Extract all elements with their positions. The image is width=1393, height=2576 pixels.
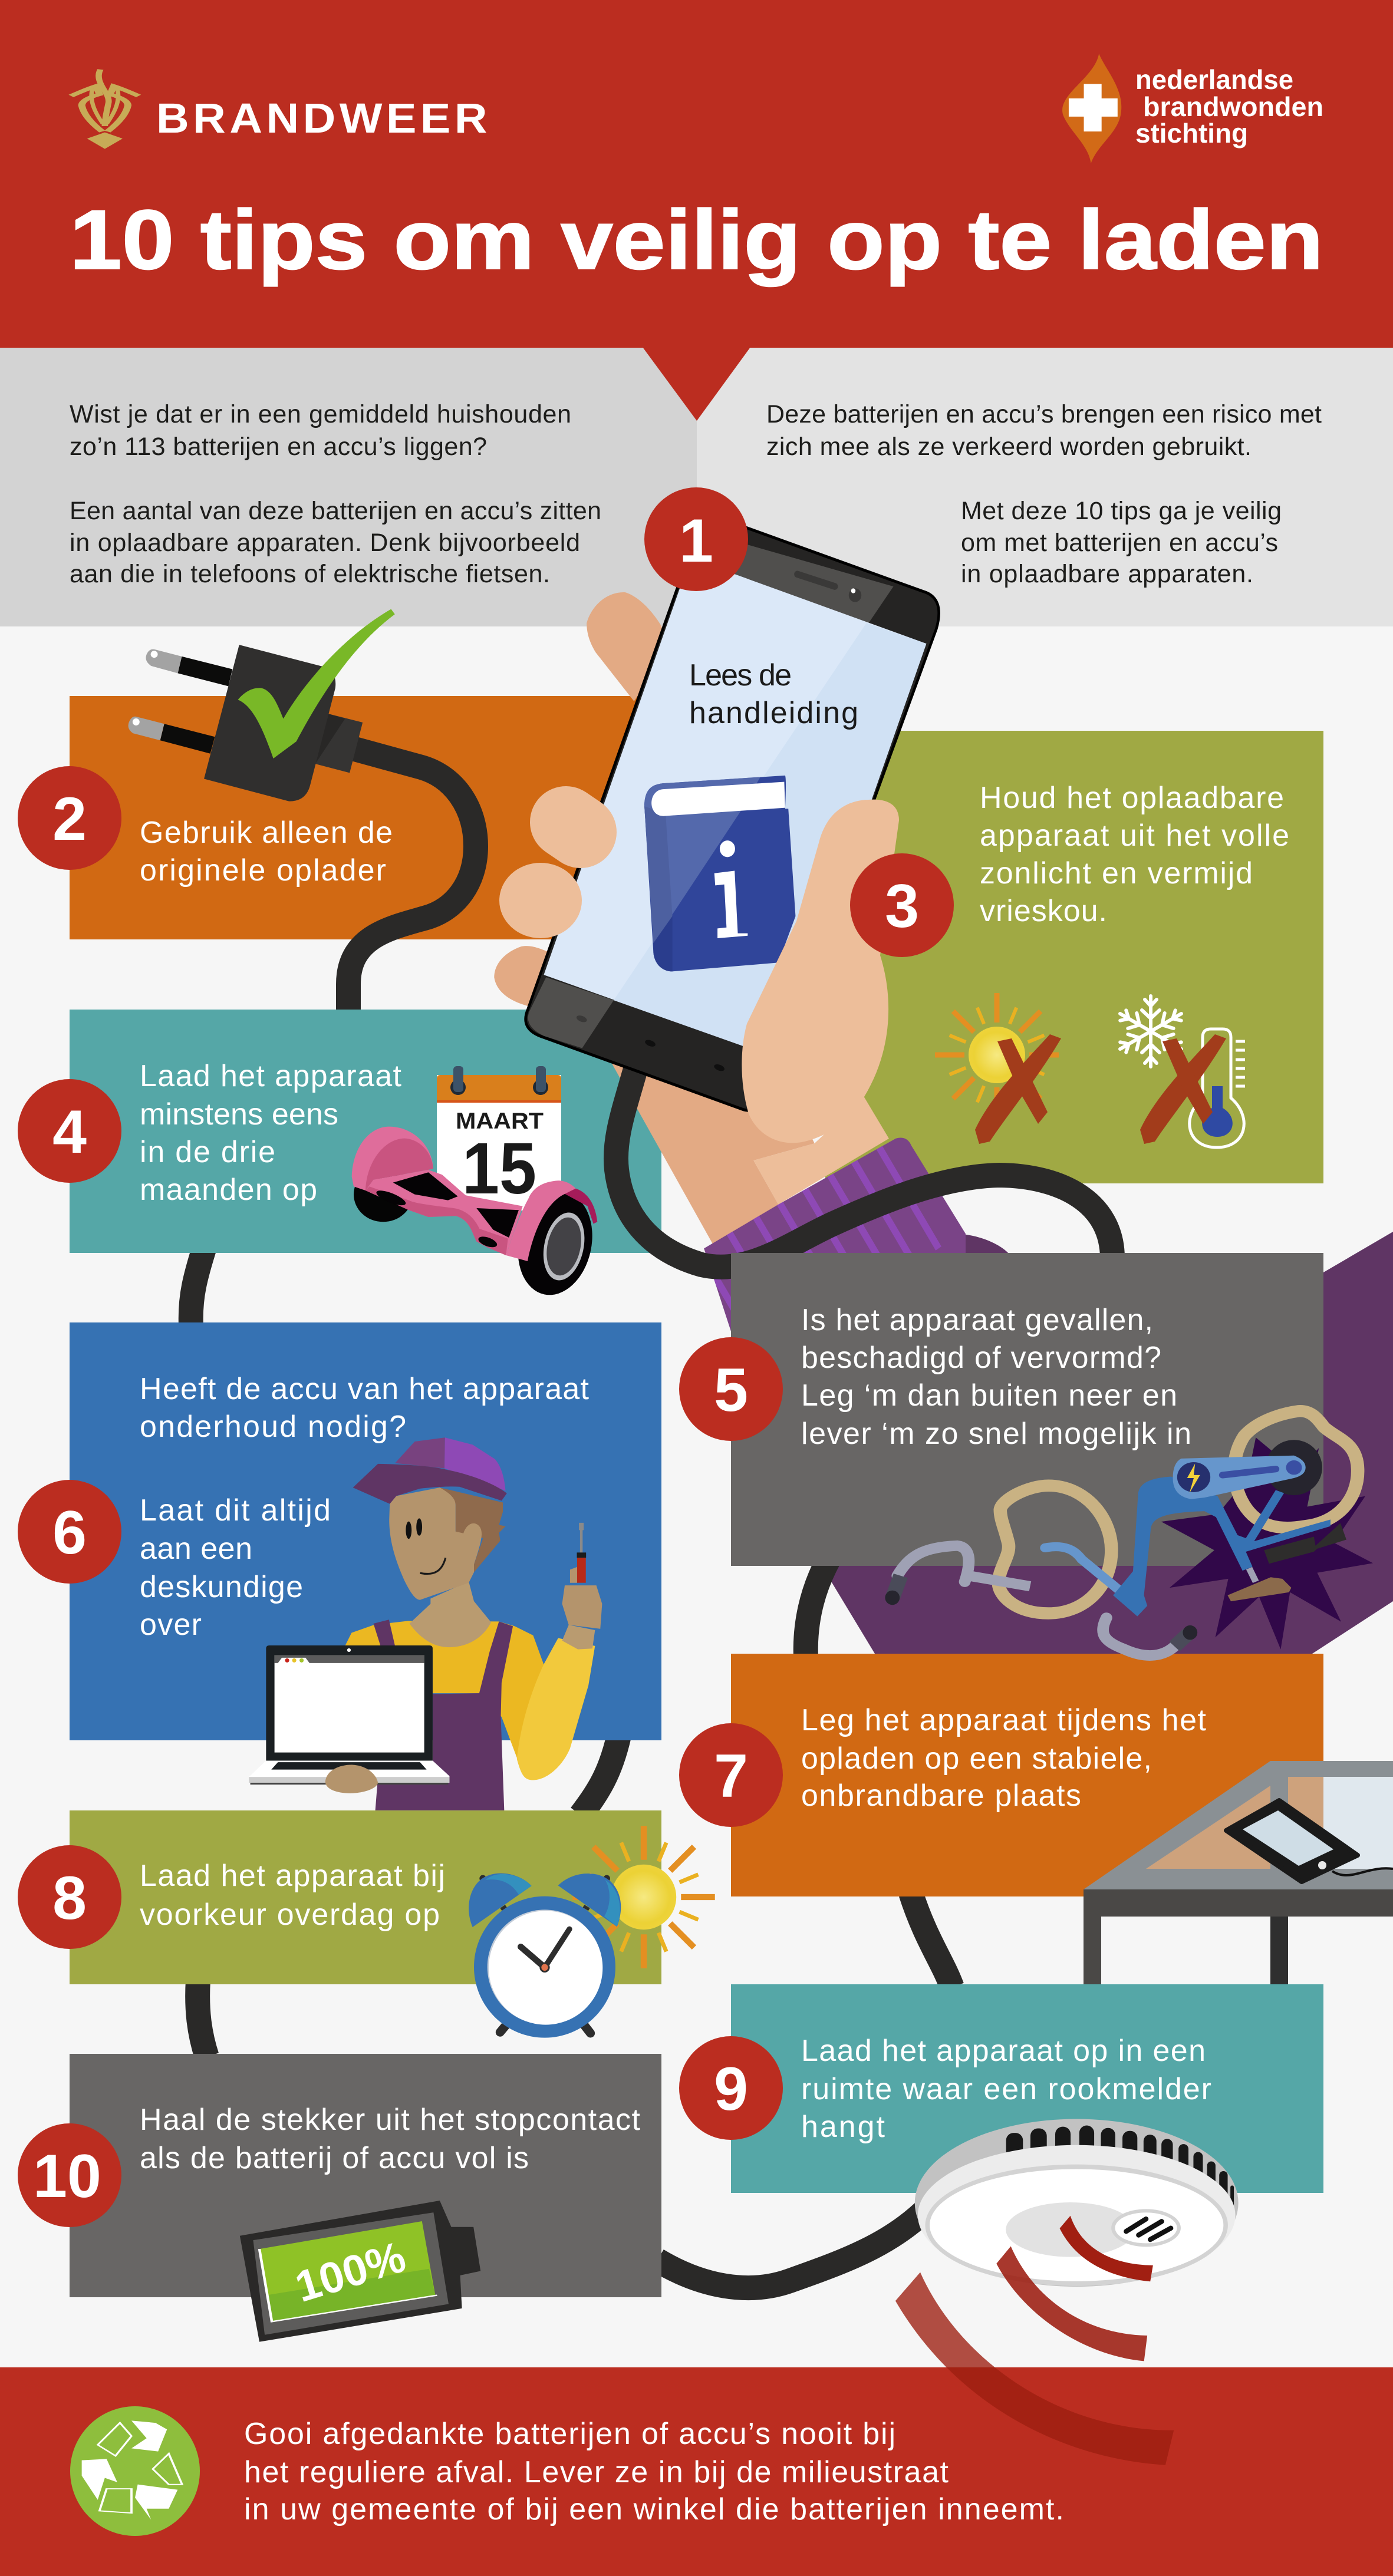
cable: tip 5 to tip 7 bbox=[806, 1556, 831, 1657]
panel: tip 3 bbox=[825, 731, 1323, 1183]
charger cable bbox=[348, 749, 476, 1014]
panel: tip 6: Laat dit altijd bbox=[140, 1493, 331, 1528]
panel: tip 7: Leg het apparaat tijdens het bbox=[801, 1703, 1207, 1737]
sleeve bbox=[704, 1137, 966, 1331]
number badge 7 bbox=[679, 1723, 783, 1827]
hand holding phone, front fingers and thumb bbox=[499, 800, 899, 1143]
dark arm bbox=[895, 1234, 1009, 1254]
phone text: Lees de handleiding: handleiding bbox=[689, 696, 858, 730]
panel: intro left bbox=[0, 348, 697, 626]
number badge 9: 9 bbox=[714, 2055, 748, 2123]
logo: Nederlandse Brandwonden Stichting bbox=[1062, 54, 1323, 163]
number badge 5: 5 bbox=[714, 1356, 748, 1424]
panel: intro left: Wist je dat er in een gemiddeld huishouden bbox=[70, 400, 571, 428]
footer bbox=[0, 2367, 1393, 2576]
icon: battery 100%: 100% bbox=[289, 2232, 411, 2311]
number badge 10 bbox=[18, 2123, 121, 2227]
number badge 7: 7 bbox=[714, 1742, 748, 1810]
icon: plug with check mark bbox=[129, 609, 395, 802]
panel: tip 6: aan een bbox=[140, 1532, 252, 1566]
cable: tip 10 to smoke detector bbox=[657, 2207, 928, 2288]
panel: intro right bbox=[697, 348, 1393, 626]
panel: tip 9: hangt bbox=[801, 2110, 885, 2144]
panel: tip 7: onbrandbare plaats bbox=[801, 1779, 1081, 1813]
panel: tip 10 bbox=[70, 2054, 661, 2297]
panel: intro right: zich mee als ze verkeerd worden gebruikt. bbox=[766, 433, 1252, 461]
panel: intro right: in oplaadbare apparaten. bbox=[961, 560, 1253, 588]
number badge 5 bbox=[679, 1337, 783, 1441]
number badge 8 bbox=[18, 1845, 121, 1949]
number badge 6: 6 bbox=[52, 1499, 87, 1567]
illustration: repair worker with laptop bbox=[249, 1437, 602, 1810]
panel: tip 9 bbox=[731, 1984, 1323, 2193]
number badge 10: 10 bbox=[33, 2142, 101, 2211]
icon: hoverboard bbox=[352, 1127, 601, 1302]
logo: Nederlandse Brandwonden Stichting: brandwonden bbox=[1143, 91, 1323, 122]
title: 10 tips om veilig op te laden bbox=[70, 193, 1323, 287]
panel: tip 3: vrieskou. bbox=[980, 894, 1107, 928]
panel: tip 10: als de batterij of accu vol is bbox=[140, 2141, 529, 2175]
cable: tip 8 to tip 10 bbox=[197, 1980, 207, 2057]
number badge 3: 3 bbox=[885, 872, 919, 941]
phone text: Lees de handleiding bbox=[689, 658, 858, 730]
panel: tip 7 bbox=[731, 1654, 1323, 1896]
panel: tip 6: Heeft de accu van het apparaat bbox=[140, 1372, 590, 1406]
panel: tip 3: apparaat uit het volle bbox=[980, 819, 1289, 853]
hand holding phone, back part bbox=[494, 592, 1009, 1346]
icon: manual book bbox=[644, 776, 795, 971]
cable: tip 4 to tip 6 bbox=[191, 1238, 208, 1326]
icon: sun bbox=[572, 1826, 715, 1968]
purple backdrop behind tip 5 bbox=[822, 1232, 1393, 1654]
number badge 1: 1 bbox=[679, 507, 713, 575]
panel: tip 5: Leg ‘m dan buiten neer en bbox=[801, 1378, 1177, 1413]
panel: intro left: Een aantal van deze batterijen en accu’s zitten bbox=[70, 497, 601, 525]
panel: tip 6: onderhoud nodig? bbox=[140, 1410, 406, 1444]
number badge 9 bbox=[679, 2036, 783, 2140]
footer: Gooi afgedankte batterijen of accu’s nooit bij bbox=[244, 2417, 895, 2451]
icon: smoke detector with sound waves bbox=[895, 2119, 1239, 2465]
panel: tip 5 bbox=[731, 1253, 1323, 1566]
footer: het reguliere afval. Lever ze in bij de milieustraat bbox=[244, 2455, 949, 2489]
footer: in uw gemeente of bij een winkel die batterijen inneemt. bbox=[244, 2492, 1064, 2526]
number badge 3 bbox=[850, 853, 954, 957]
panel: tip 9: Laad het apparaat op in een bbox=[801, 2034, 1206, 2068]
logo: Nederlandse Brandwonden Stichting: nederlandse bbox=[1135, 64, 1293, 95]
panel: tip 4 bbox=[70, 1010, 661, 1253]
panel: intro right: om met batterijen en accu’s bbox=[961, 529, 1278, 557]
panel: intro left: zo’n 113 batterijen en accu’s liggen? bbox=[70, 433, 487, 461]
panel: intro left: in oplaadbare apparaten. Denk bijvoorbeeld bbox=[70, 529, 580, 557]
header pointer triangle bbox=[643, 347, 750, 421]
panel: tip 8: Laad het apparaat bij bbox=[140, 1859, 445, 1893]
logo: Brandweer: BRANDWEER bbox=[156, 95, 491, 142]
phone cable bbox=[616, 1061, 1112, 1267]
number badge 8: 8 bbox=[52, 1864, 87, 1932]
icon: alarm clock bbox=[469, 1874, 621, 2038]
cable: tip 6 to tip 8 bbox=[581, 1736, 619, 1815]
panel: tip 8 bbox=[70, 1810, 661, 1984]
panel: tip 6: deskundige bbox=[140, 1570, 303, 1604]
number badge 4 bbox=[18, 1079, 121, 1183]
panel: tip 4: minstens eens bbox=[140, 1097, 338, 1132]
illustration: bike wreck bbox=[885, 1411, 1373, 1655]
cable: tip 7 to tip 9 bbox=[911, 1893, 952, 1987]
logo: Nederlandse Brandwonden Stichting: stichting bbox=[1135, 118, 1248, 149]
logo: Brandweer bbox=[71, 70, 491, 149]
icon: sun crossed out bbox=[935, 993, 1061, 1144]
icon: snowflake and thermometer crossed out bbox=[1116, 996, 1245, 1147]
panel: intro left: aan die in telefoons of elektrische fietsen. bbox=[70, 560, 550, 588]
phone text: Lees de handleiding: Lees de bbox=[689, 658, 792, 692]
panel: tip 2: Gebruik alleen de bbox=[140, 816, 393, 850]
number badge 2 bbox=[18, 766, 121, 870]
panel: tip 6: over bbox=[140, 1608, 202, 1642]
number badge 1 bbox=[644, 487, 748, 591]
phone with manual icon bbox=[526, 521, 939, 1110]
icon: calendar 15 maart bbox=[437, 1066, 561, 1211]
icon: calendar 15 maart: MAART bbox=[456, 1109, 544, 1134]
panel: tip 8: voorkeur overdag op bbox=[140, 1898, 440, 1932]
panel: tip 2: originele oplader bbox=[140, 853, 386, 888]
panel: intro right: Met deze 10 tips ga je veilig bbox=[961, 497, 1282, 525]
panel: tip 10: Haal de stekker uit het stopcontact bbox=[140, 2103, 641, 2137]
header band bbox=[0, 0, 1393, 348]
panel: tip 4: in de drie bbox=[140, 1135, 275, 1169]
panel: tip 3: zonlicht en vermijd bbox=[980, 856, 1253, 890]
panel: tip 5: beschadigd of vervormd? bbox=[801, 1341, 1161, 1375]
icon: recycling bbox=[70, 2406, 200, 2536]
panel: tip 2 bbox=[70, 696, 643, 939]
panel: intro right: Deze batterijen en accu’s brengen een risico met bbox=[766, 400, 1322, 428]
panel: tip 4: Laad het apparaat bbox=[140, 1059, 402, 1093]
panel: tip 7: opladen op een stabiele, bbox=[801, 1741, 1152, 1776]
illustration: table with charging phone bbox=[1084, 1761, 1393, 1984]
icon: calendar 15 maart: 15 bbox=[462, 1129, 536, 1209]
panel: tip 4: maanden op bbox=[140, 1173, 317, 1207]
panel: tip 3: Houd het oplaadbare bbox=[980, 781, 1284, 815]
icon: battery 100% bbox=[240, 2201, 480, 2342]
panel: tip 5: lever ‘m zo snel mogelijk in bbox=[801, 1417, 1191, 1451]
panel: tip 5: Is het apparaat gevallen, bbox=[801, 1303, 1153, 1337]
number badge 2: 2 bbox=[52, 785, 87, 853]
number badge 6 bbox=[18, 1480, 121, 1584]
panel: tip 9: ruimte waar een rookmelder bbox=[801, 2072, 1211, 2106]
number badge 4: 4 bbox=[52, 1098, 87, 1166]
panel: tip 6 bbox=[70, 1322, 661, 1740]
